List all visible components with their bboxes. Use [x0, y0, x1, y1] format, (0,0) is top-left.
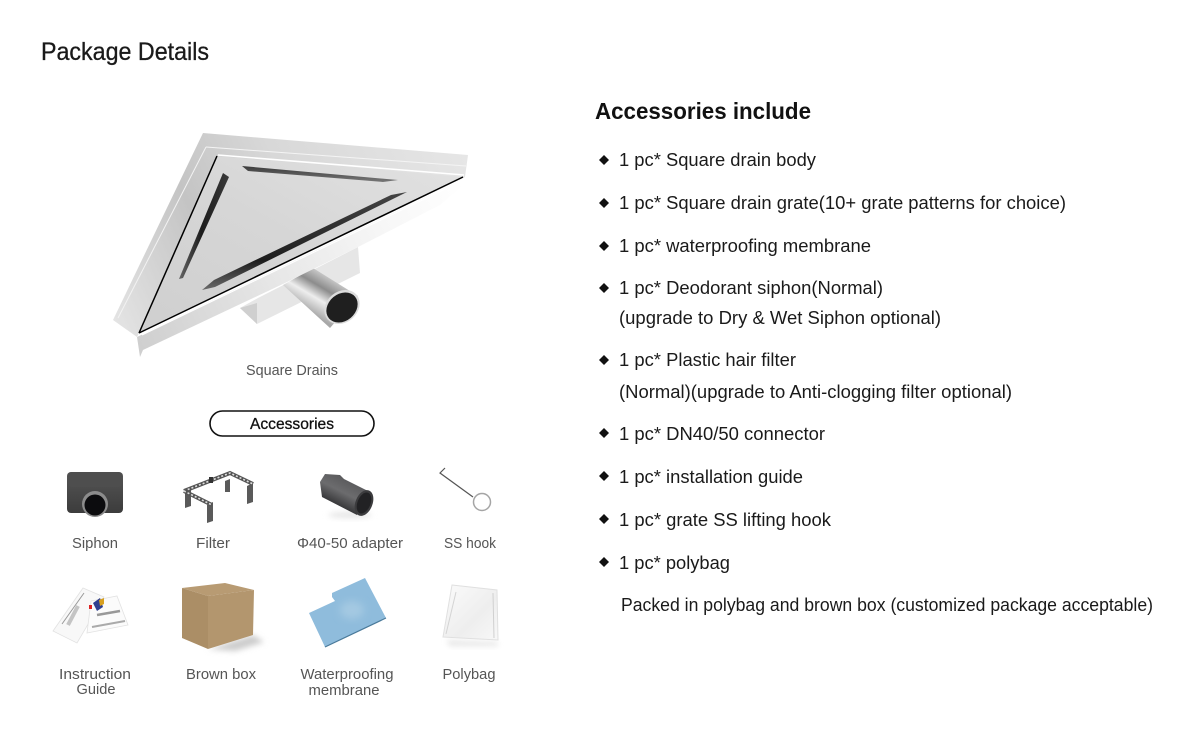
item: siphon: (upgrade to Dry & Wet Siphon optional) — [619, 308, 941, 328]
grate edge highlight — [218, 155, 464, 175]
item: hair filter — [599, 350, 1012, 402]
accessory: siphon — [67, 472, 123, 552]
item: installation guide: 1 pc* installation guide — [619, 467, 803, 487]
accessory: siphon: Siphon — [72, 536, 118, 552]
grate slot: left — [179, 173, 229, 279]
item: connector: 1 pc* DN40/50 connector — [619, 424, 825, 444]
accessory: instruction guide — [53, 588, 131, 698]
accessory: SS hook: SS hook — [444, 536, 497, 552]
accessories pill heading: Accessories — [250, 416, 334, 433]
product image: triangular drain — [113, 133, 468, 357]
accessory: waterproofing membrane: membrane — [308, 683, 380, 699]
title: Package Details — [41, 38, 209, 66]
grate bottom edge highlight — [142, 179, 466, 335]
accessory: filter — [184, 473, 253, 552]
item: membrane: 1 pc* waterproofing membrane — [619, 236, 871, 256]
item: siphon: 1 pc* Deodorant siphon(Normal) — [619, 278, 883, 298]
item: drain body: 1 pc* Square drain body — [619, 150, 816, 170]
accessories pill heading — [210, 411, 374, 436]
accessory: waterproofing membrane: Waterproofing — [300, 667, 394, 683]
item: hair filter: 1 pc* Plastic hair filter — [619, 350, 796, 370]
accessory: brown box — [182, 583, 264, 683]
accessory: adapter — [297, 474, 403, 552]
grate left edge — [139, 156, 217, 333]
drain grate top — [139, 156, 463, 333]
packing note: Packed in polybag and brown box (customized package acceptable) — [621, 595, 1153, 615]
item: drain grate: 1 pc* Square drain grate(10+ grate patterns for choice) — [619, 193, 1066, 213]
accessory: brown box: Brown box — [186, 667, 257, 683]
grate slot: bottom — [202, 192, 407, 290]
accessory: polybag — [442, 585, 498, 683]
drain flange — [113, 133, 468, 337]
grate bottom edge — [139, 177, 463, 333]
accessory: polybag: Polybag — [442, 667, 496, 683]
drain outlet pipe — [283, 268, 367, 331]
drain flange fold line — [118, 147, 206, 318]
accessory: adapter: Φ40-50 adapter — [297, 536, 403, 552]
item: hair filter: (Normal)(upgrade to Anti-clogging filter optional) — [619, 382, 1012, 402]
drain flange top fold line — [206, 147, 466, 166]
item: lifting hook: 1 pc* grate SS lifting hook — [619, 510, 832, 530]
item: siphon — [599, 278, 941, 328]
accessory: instruction guide: Guide — [76, 682, 116, 698]
heading: accessories include: Accessories include — [595, 98, 811, 124]
label: Square Drains: Square Drains — [246, 363, 338, 379]
drain front lip — [137, 177, 467, 357]
accessory: instruction guide: Instruction — [59, 667, 131, 683]
accessory: filter: Filter — [196, 536, 230, 552]
accessory: waterproofing membrane — [300, 578, 394, 699]
item: polybag: 1 pc* polybag — [619, 553, 730, 573]
grate slot: top — [242, 166, 398, 182]
list: accessories — [599, 150, 1066, 573]
drain body box — [240, 247, 360, 324]
accessory: SS hook — [440, 468, 497, 552]
